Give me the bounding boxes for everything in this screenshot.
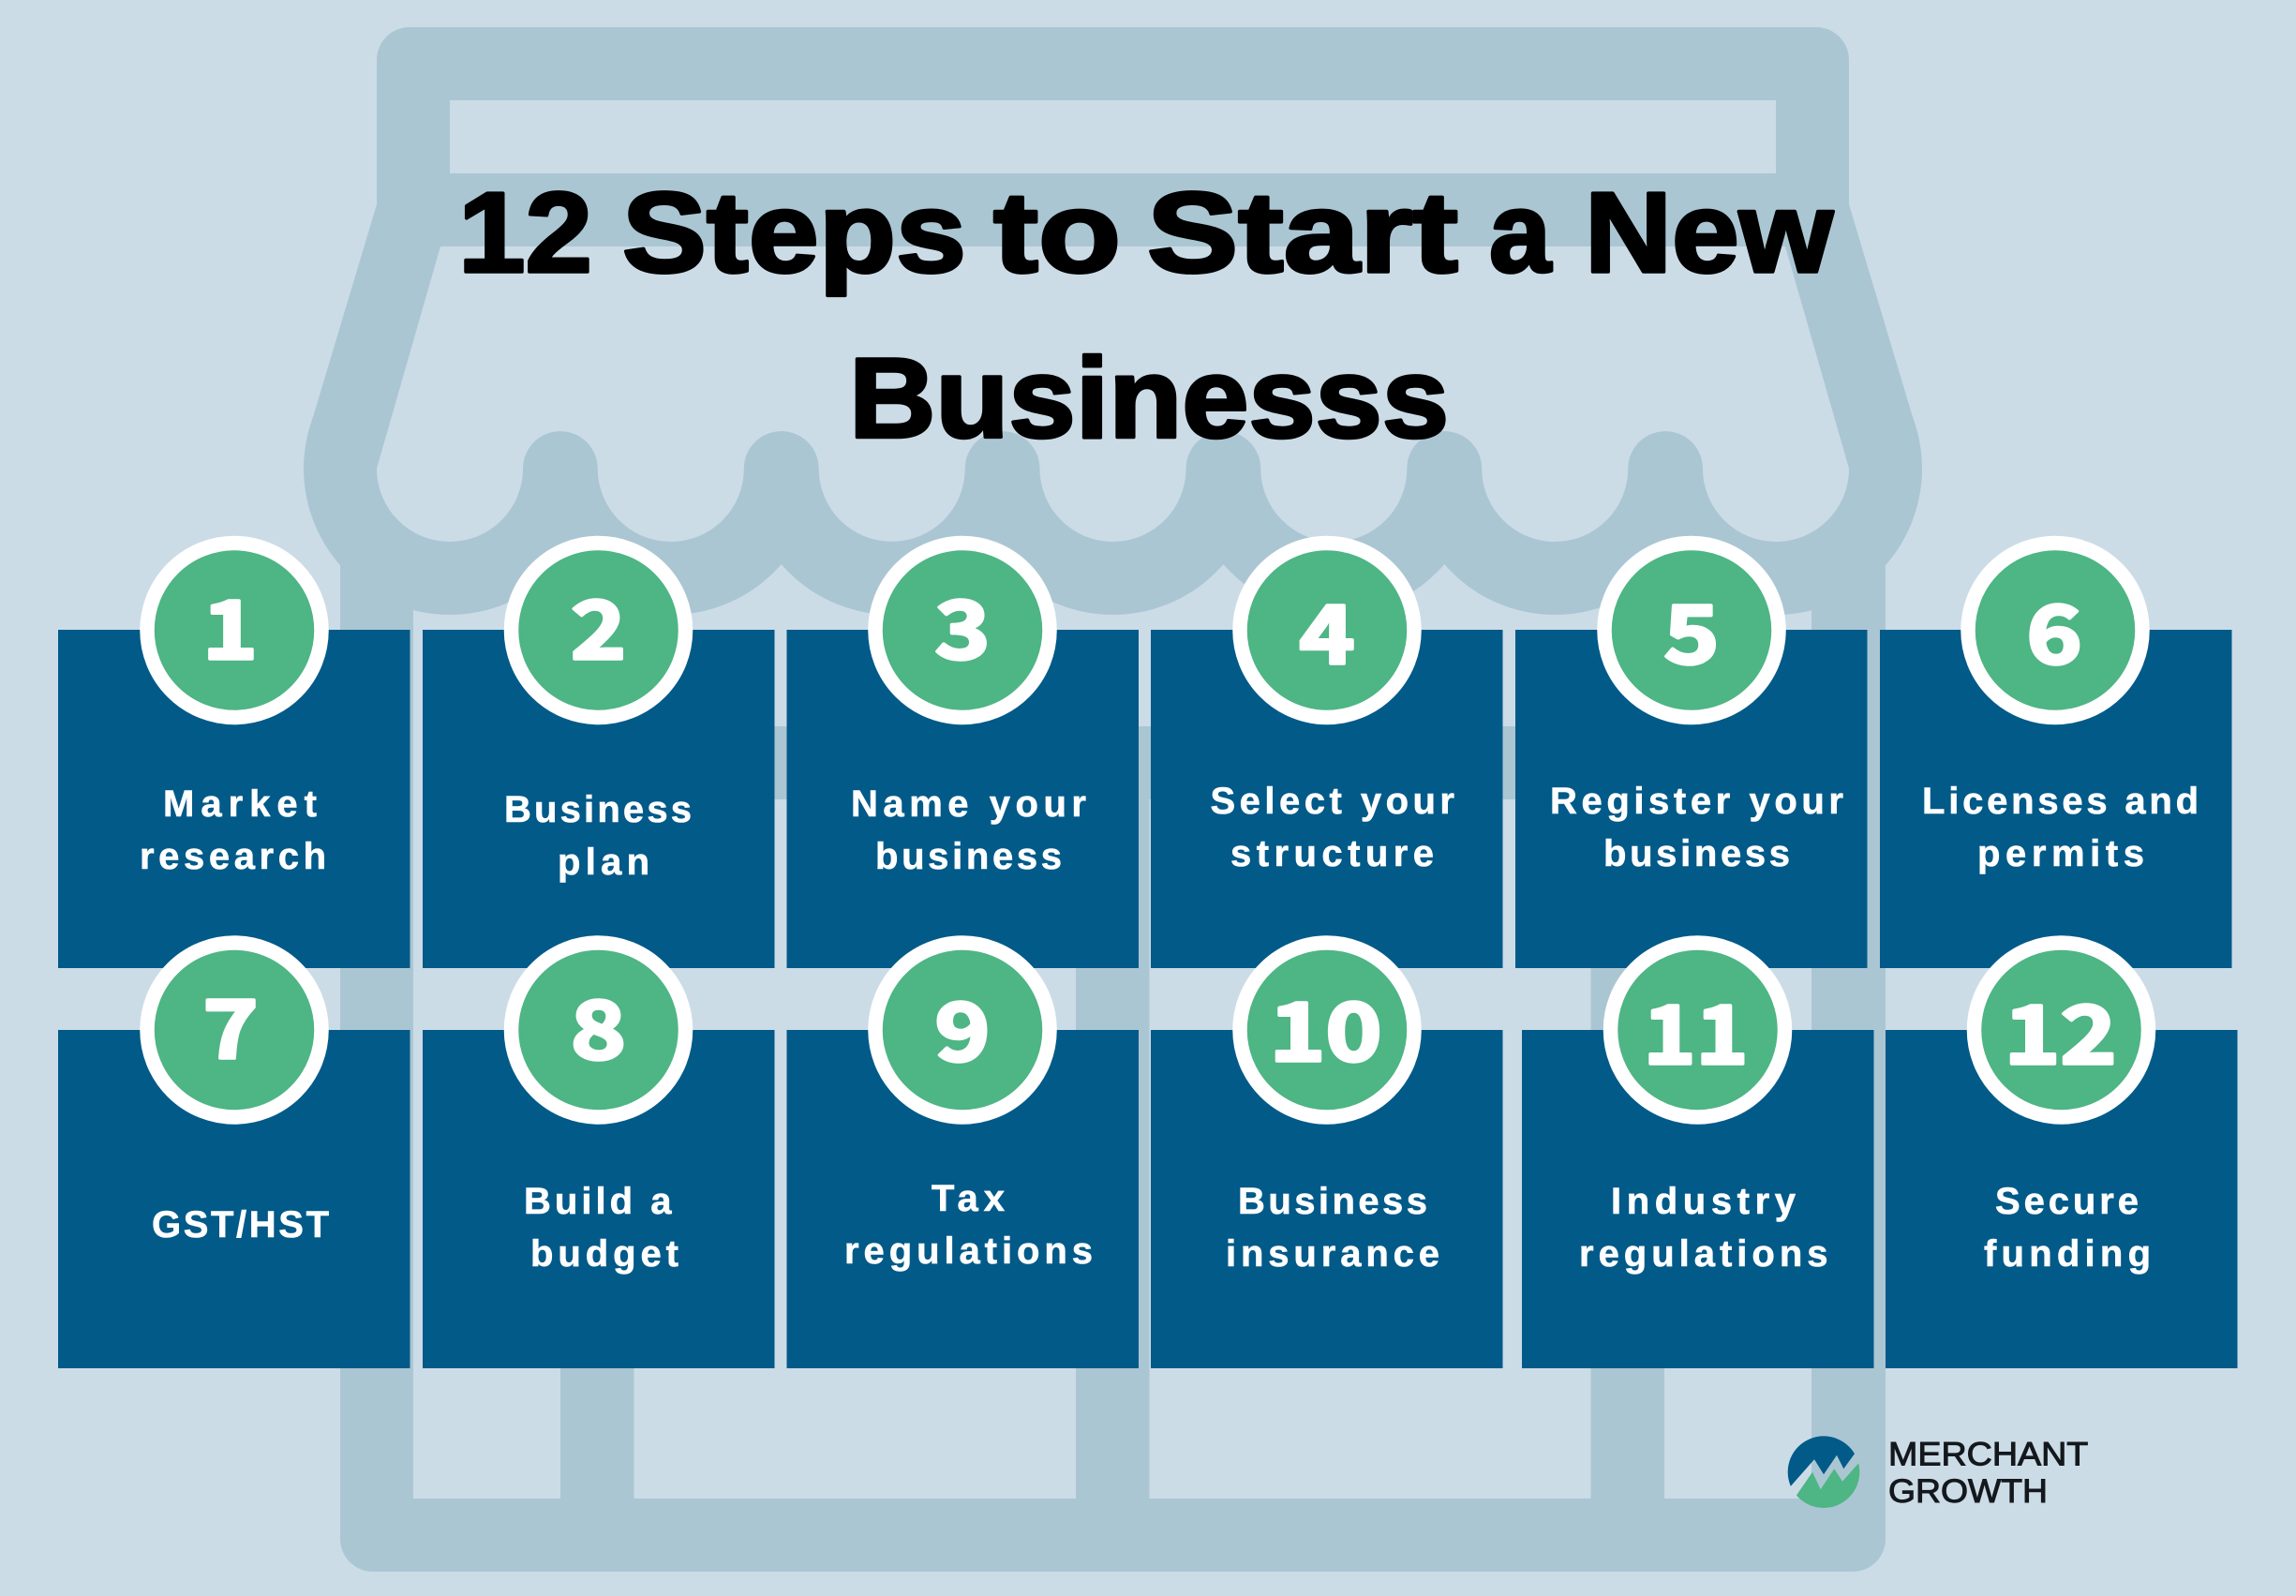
step 6: licenses and permits: [1880, 544, 2232, 968]
step 12: secure funding: funding: [1984, 1233, 2151, 1275]
title: 12: [458, 169, 592, 296]
step 12: secure funding: Secure: [1995, 1181, 2139, 1222]
step 3: name your business: Name your: [851, 783, 1086, 825]
step 5: register your business: business: [1603, 833, 1790, 874]
step 8: build a budget: budget: [530, 1233, 678, 1275]
step 10: business insurance: Business: [1238, 1181, 1427, 1222]
step 4: select your structure: structure: [1230, 833, 1434, 874]
step 11: industry regulations: 11: [1644, 970, 1749, 1087]
step 3: name your business: 3: [935, 565, 990, 682]
step 7: GST/HST: 7: [202, 964, 259, 1081]
step 1: market research: Market: [163, 783, 317, 825]
step 7: GST/HST: [58, 943, 410, 1368]
step 8: build a budget: 8: [571, 965, 626, 1082]
title: New: [1585, 169, 1834, 296]
step 10: business insurance: insurance: [1226, 1233, 1439, 1275]
title: Steps: [622, 169, 966, 296]
step 5: register your business: [1515, 544, 1867, 968]
step 6: licenses and permits: permits: [1977, 833, 2144, 874]
step 4: select your structure: 4: [1299, 570, 1355, 687]
step 9: tax regulations: Tax: [932, 1178, 1005, 1219]
step 5: register your business: 5: [1664, 570, 1719, 687]
title: Businesss: [849, 334, 1449, 461]
title: a: [1489, 169, 1552, 296]
step 2: business plan: [423, 544, 774, 968]
step 2: business plan: plan: [558, 842, 649, 883]
step 1: market research: 1: [202, 565, 258, 682]
step 4: select your structure: Select your: [1211, 781, 1454, 822]
step 8: build a budget: [423, 943, 774, 1368]
step 12: secure funding: 12: [2004, 970, 2116, 1087]
step 7: GST/HST: GST/HST: [152, 1204, 329, 1245]
step 2: business plan: 2: [571, 565, 626, 682]
title: to: [993, 169, 1121, 296]
step 5: register your business: Register your: [1550, 781, 1843, 822]
step 11: industry regulations: Industry: [1611, 1181, 1797, 1222]
step 9: tax regulations: [787, 943, 1139, 1368]
logo: Merchant Growth: GROWTH: [1888, 1473, 2048, 1510]
step 11: industry regulations: [1522, 943, 1874, 1368]
step 12: secure funding: [1886, 943, 2238, 1368]
step 3: name your business: business: [875, 836, 1062, 877]
step 1: market research: research: [140, 836, 326, 877]
step 2: business plan: Business: [504, 789, 692, 830]
step 10: business insurance: 10: [1269, 967, 1381, 1084]
step 4: select your structure: [1151, 544, 1503, 968]
step 3: name your business: [787, 544, 1139, 968]
logo: Merchant Growth: MERCHANT: [1888, 1436, 2088, 1472]
icon: storefront background illustration: [304, 27, 1922, 1572]
step 9: tax regulations: 9: [935, 967, 990, 1084]
step 10: business insurance: [1151, 943, 1503, 1368]
step 6: licenses and permits: Licenses and: [1922, 781, 2199, 822]
logo: Merchant Growth: [1788, 1436, 2088, 1510]
title: Start: [1147, 169, 1458, 296]
step 6: licenses and permits: 6: [2026, 570, 2082, 687]
title: [458, 169, 1834, 461]
step 9: tax regulations: regulations: [844, 1231, 1093, 1272]
step 1: market research: [58, 544, 410, 968]
step 8: build a budget: Build a: [524, 1181, 672, 1222]
step 11: industry regulations: regulations: [1579, 1233, 1827, 1275]
